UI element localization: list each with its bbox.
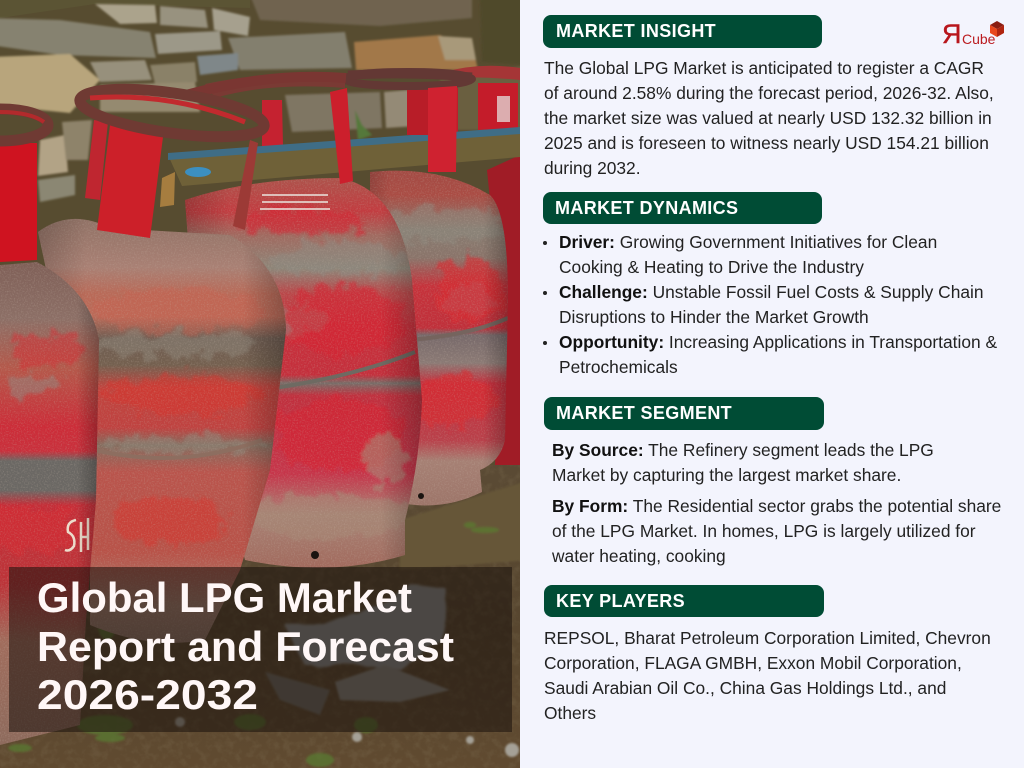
text: key players: Saudi Arabian Oil Co., China Gas Holdings Ltd., and bbox=[544, 678, 946, 698]
list: market dynamics: Cooking & Heating to Drive the Industry bbox=[559, 257, 864, 277]
dark title overlay bbox=[9, 567, 512, 732]
heading: market segment bbox=[544, 397, 824, 430]
list: market dynamics bbox=[543, 232, 997, 377]
text: market insight: the market size was valued at nearly USD 132.32 billion in bbox=[544, 108, 992, 128]
text: by form bbox=[552, 496, 1001, 566]
logo: RCube: Cube bbox=[962, 31, 995, 47]
list: market dynamics: Disruptions to Hinder the Market Growth bbox=[559, 307, 869, 327]
list: market dynamics: Opportunity: Increasing Applications in Transportation & bbox=[559, 332, 997, 352]
logo: RCube bbox=[942, 19, 1004, 49]
text: by form: By Form: The Residential sector grabs the potential share bbox=[552, 496, 1001, 516]
stone wall background bbox=[0, 0, 530, 768]
heading: market insight: MARKET INSIGHT bbox=[556, 21, 716, 41]
heading: key players bbox=[544, 585, 824, 617]
heading: key players: KEY PLAYERS bbox=[556, 590, 685, 610]
text: by source bbox=[552, 440, 934, 485]
text: by form: of the LPG Market. In homes, LPG is largely utilized for bbox=[552, 521, 976, 541]
text: market insight: during 2032. bbox=[544, 158, 641, 178]
text: key players: REPSOL, Bharat Petroleum Corporation Limited, Chevron bbox=[544, 628, 991, 648]
text: key players bbox=[544, 628, 991, 723]
heading: market segment: MARKET SEGMENT bbox=[556, 403, 732, 423]
cylinder E far right bbox=[445, 66, 520, 465]
text: by source: Market by capturing the largest market share. bbox=[552, 465, 901, 485]
text: key players: Others bbox=[544, 703, 596, 723]
text: market insight bbox=[544, 58, 994, 178]
photo: red LPG cylinders bbox=[0, 0, 520, 768]
text: market insight: 2025 and is foreseen to witness nearly USD 154.21 billion bbox=[544, 133, 989, 153]
heading: market dynamics: MARKET DYNAMICS bbox=[555, 198, 738, 218]
list: market dynamics: Driver: Growing Government Initiatives for Clean bbox=[559, 232, 937, 252]
title: Global LPG Market bbox=[37, 574, 412, 621]
text: by source: By Source: The Refinery segment leads the LPG bbox=[552, 440, 934, 460]
text: by form: water heating, cooking bbox=[552, 546, 726, 566]
title bbox=[37, 574, 454, 718]
title: Report and Forecast bbox=[37, 623, 454, 670]
metal beam bbox=[168, 74, 520, 186]
text: key players: Corporation, FLAGA GMBH, Exxon Mobil Corporation, bbox=[544, 653, 962, 673]
title: 2026-2032 bbox=[37, 671, 258, 718]
list: market dynamics: Petrochemicals bbox=[559, 357, 678, 377]
heading: market insight bbox=[543, 15, 822, 48]
text: market insight: The Global LPG Market is anticipated to register a CAGR bbox=[544, 58, 984, 78]
logo: RCube: Я bbox=[942, 19, 962, 49]
list: market dynamics: Challenge: Unstable Fossil Fuel Costs & Supply Chain bbox=[559, 282, 984, 302]
ground bbox=[0, 465, 530, 768]
cylinder B bbox=[36, 80, 288, 650]
heading: market dynamics bbox=[543, 192, 822, 224]
text: market insight: of around 2.58% during the forecast period, 2026-32. Also, bbox=[544, 83, 994, 103]
cylinder D bbox=[344, 72, 520, 510]
cylinder A bbox=[0, 109, 100, 750]
cylinder C bbox=[180, 74, 425, 580]
